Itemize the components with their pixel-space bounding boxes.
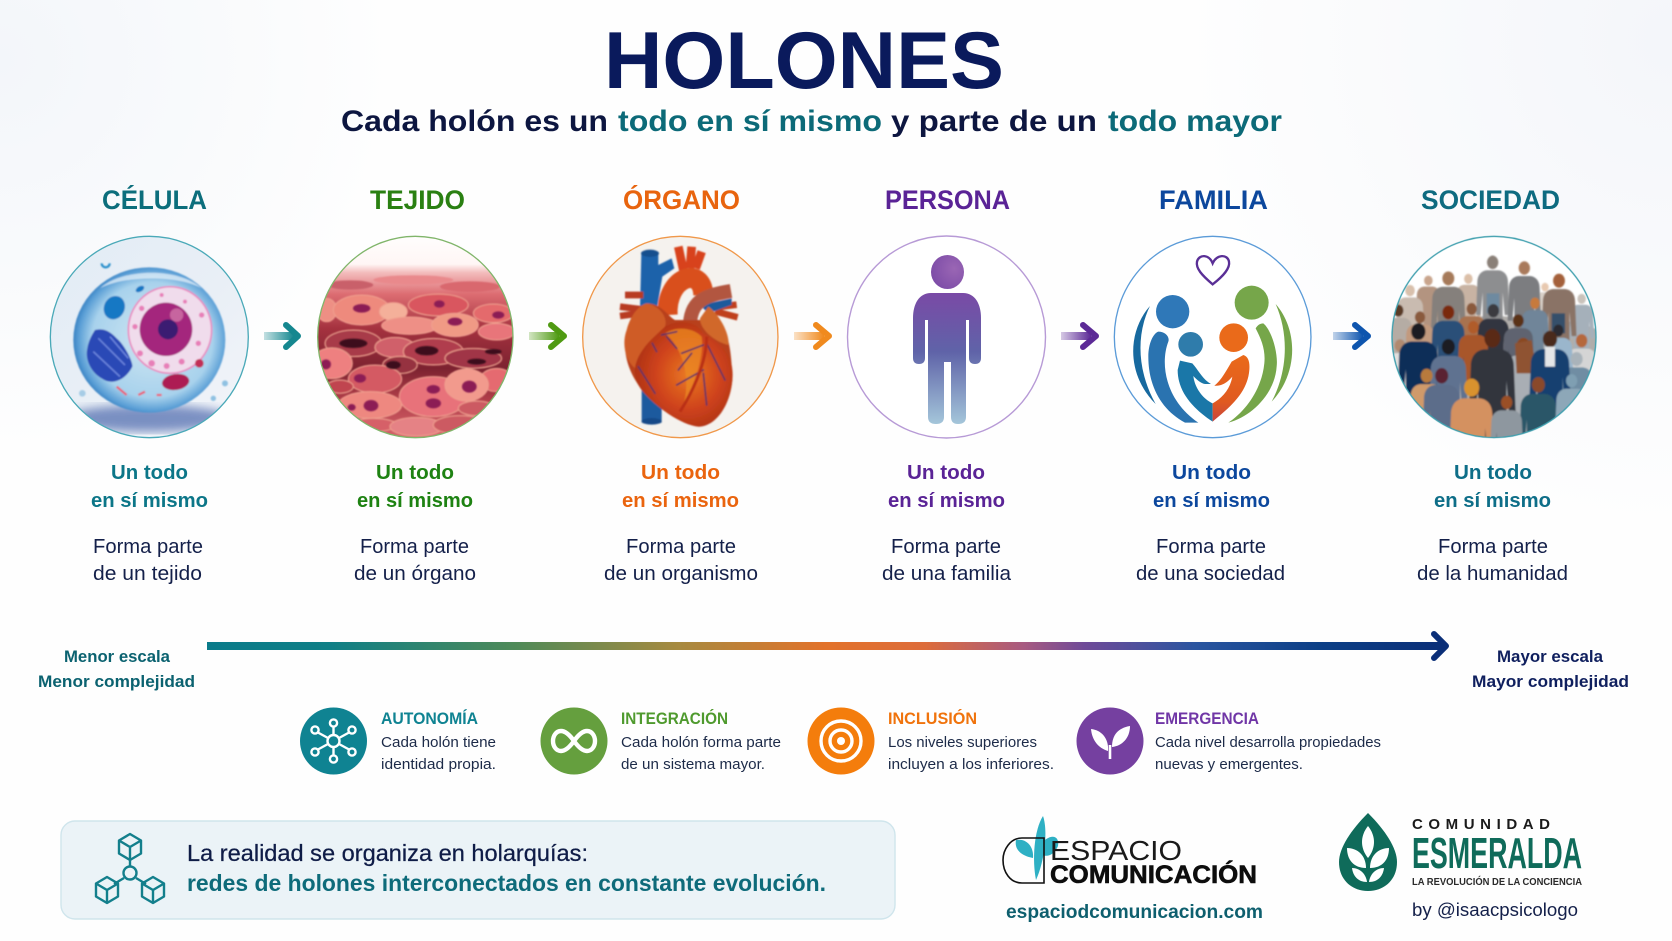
logo: comunidad esmeralda: LA REVOLUCIÓN DE LA CONCIENCIA: [1412, 875, 1582, 888]
description: [621, 734, 781, 773]
logo: espacio comunicación: COMUNICACIÓN: [1050, 859, 1257, 889]
arrow: familia to sociedad: [1333, 325, 1368, 347]
heading: EMERGENCIA: [1155, 710, 1259, 728]
text: forma parte: de una sociedad: [1136, 563, 1285, 585]
callout panel: [61, 821, 895, 919]
scale label: mayor: Mayor complejidad: [1472, 672, 1629, 691]
description: de un sistema mayor.: [621, 756, 765, 773]
description: Cada nivel desarrolla propiedades: [1155, 734, 1381, 751]
subtitle: y parte de un: [891, 105, 1097, 138]
heading: INTEGRACIÓN: [621, 709, 728, 728]
column: persona: [848, 185, 1046, 585]
text: un todo: Un todo: [641, 461, 720, 484]
heading: INCLUSIÓN: [888, 709, 977, 728]
illustration: crowd: [1391, 236, 1597, 439]
text: un todo: en sí mismo: [357, 489, 473, 512]
column: célula: [50, 184, 248, 585]
handle: by @isaacpsicologo: [1412, 900, 1578, 920]
text: un todo: [622, 461, 739, 512]
legend: integración: [540, 708, 781, 774]
scale label: mayor: [1472, 647, 1629, 691]
text: forma parte: Forma parte: [93, 536, 203, 558]
text: forma parte: Forma parte: [360, 536, 469, 558]
icon: sprout: [1076, 708, 1144, 774]
callout text: [187, 840, 826, 896]
icon: network: [300, 708, 367, 774]
text: forma parte: Forma parte: [891, 536, 1001, 558]
callout text: redes de holones interconectados en constante evolución.: [187, 870, 826, 896]
text: forma parte: de un organismo: [604, 563, 758, 585]
heading: ÓRGANO: [623, 184, 740, 215]
title: HOLONES: [604, 16, 1004, 106]
arrow: célula to tejido: [264, 325, 298, 347]
text: un todo: en sí mismo: [888, 489, 1005, 512]
illustration: cell: [50, 236, 248, 438]
text: forma parte: [1136, 536, 1285, 585]
text: un todo: Un todo: [907, 461, 985, 484]
subtitle: [341, 105, 1282, 138]
logo: espacio comunicación: [1003, 816, 1263, 923]
text: un todo: Un todo: [111, 461, 188, 484]
callout text: La realidad se organiza en holarquías:: [187, 840, 588, 866]
subtitle: todo en sí mismo: [618, 105, 882, 138]
plant mark: [1016, 816, 1058, 880]
subtitle: todo mayor: [1108, 105, 1282, 138]
legend: emergencia: [1076, 708, 1381, 774]
text: un todo: Un todo: [376, 461, 454, 484]
text: un todo: [91, 461, 208, 512]
text: un todo: en sí mismo: [91, 489, 208, 512]
illustration: tissue: [317, 236, 514, 438]
heading: FAMILIA: [1159, 185, 1268, 215]
description: incluyen a los inferiores.: [888, 756, 1054, 773]
text: forma parte: Forma parte: [1156, 536, 1266, 558]
legend: inclusión: [808, 708, 1054, 774]
column: órgano: [583, 184, 778, 585]
scale label: menor: [38, 647, 195, 691]
description: [888, 734, 1054, 773]
text: forma parte: [882, 536, 1012, 585]
arrow: tejido to órgano: [529, 325, 564, 347]
text: un todo: Un todo: [1172, 461, 1251, 484]
text: forma parte: [604, 536, 758, 585]
text: un todo: Un todo: [1454, 461, 1532, 484]
icon: infinity: [540, 708, 608, 774]
text: forma parte: [354, 536, 476, 585]
heading: CÉLULA: [102, 184, 207, 215]
text: forma parte: de un tejido: [93, 563, 202, 585]
heading: PERSONA: [885, 185, 1010, 215]
wordmark: ESPACIO: [1050, 835, 1182, 866]
description: Cada holón forma parte: [621, 734, 781, 751]
heading: AUTONOMÍA: [381, 709, 478, 728]
scale label: menor: Menor escala: [64, 647, 171, 666]
text: forma parte: Forma parte: [626, 536, 736, 558]
text: forma parte: de la humanidad: [1417, 563, 1568, 585]
icon: target: [808, 708, 874, 774]
description: Cada holón tiene: [381, 734, 496, 751]
description: identidad propia.: [381, 756, 496, 773]
logo: comunidad esmeralda: [1339, 813, 1582, 920]
leaf mark: [1339, 813, 1397, 891]
wordmark: COMUNIDAD: [1412, 816, 1550, 833]
illustration: family: [1114, 236, 1311, 438]
legend: autonomía: [300, 708, 496, 774]
arrow: persona to familia: [1061, 325, 1096, 347]
column: tejido: [310, 185, 523, 585]
description: Los niveles superiores: [888, 734, 1037, 751]
illustration: person: [848, 236, 1046, 438]
text: un todo: [888, 461, 1005, 512]
text: un todo: [357, 461, 473, 512]
text: un todo: [1153, 461, 1270, 512]
text: un todo: en sí mismo: [622, 489, 739, 512]
column: sociedad: [1383, 185, 1598, 585]
text: un todo: [1434, 461, 1551, 512]
subtitle: Cada holón es un: [341, 105, 608, 138]
text: forma parte: Forma parte: [1438, 536, 1548, 558]
scale label: menor: Menor complejidad: [38, 672, 195, 691]
text: forma parte: de un órgano: [354, 563, 476, 585]
description: [1155, 734, 1381, 773]
text: forma parte: [1417, 536, 1568, 585]
heading: SOCIEDAD: [1421, 185, 1560, 215]
illustration: heart: [583, 236, 778, 438]
scale arrow: [207, 634, 1446, 658]
icon: holarchy cubes: [96, 834, 164, 903]
scale label: mayor: Mayor escala: [1497, 647, 1604, 666]
arrow: órgano to persona: [794, 325, 829, 347]
description: [381, 734, 496, 773]
url: espaciodcomunicacion.com: [1006, 902, 1263, 923]
text: forma parte: de una familia: [882, 563, 1012, 585]
description: nuevas y emergentes.: [1155, 756, 1303, 773]
text: un todo: en sí mismo: [1153, 489, 1270, 512]
heading: TEJIDO: [370, 185, 465, 215]
column: familia: [1114, 185, 1311, 585]
text: un todo: en sí mismo: [1434, 489, 1551, 512]
text: forma parte: [93, 536, 203, 585]
